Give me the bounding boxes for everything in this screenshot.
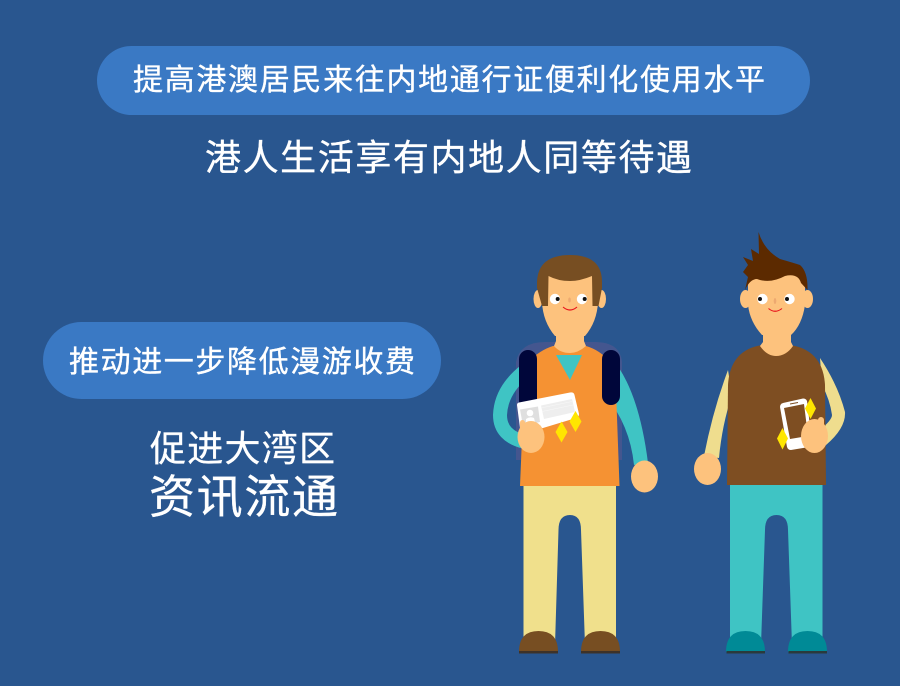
backpack straps [519,350,537,410]
text block: greater bay area information flow [149,428,338,523]
text block: greater bay area information flow: 资讯流通 [149,471,338,523]
right arm [820,358,845,445]
shoes [726,631,827,654]
shoes [519,631,620,654]
teal shirt [556,355,582,380]
smartphone [780,398,812,450]
orange vest [520,346,620,486]
smile [563,307,577,310]
left arm [704,370,732,458]
neck [554,330,586,353]
text block: greater bay area information flow: 促进大湾区 [150,428,335,469]
trousers [524,486,616,645]
left hand [694,453,721,485]
right arm [605,365,648,465]
brown torso [727,345,826,485]
top pill heading [97,46,810,115]
sparkles [556,411,582,442]
eyes [757,294,795,304]
trousers [730,485,822,645]
smile [768,308,782,311]
hair [743,232,808,290]
neck [760,330,793,356]
head [748,272,805,335]
eyes [550,294,587,304]
figure: man with smartphone [694,232,845,654]
backpack shadow [516,342,622,460]
figure: man with backpack holding ID card [500,255,658,654]
head [542,270,598,336]
hair [537,255,602,306]
right hand [801,417,828,453]
ears [740,290,751,308]
left hand [518,420,544,453]
top pill heading: 提高港澳居民来往内地通行证便利化使用水平 [133,64,765,97]
roaming pill heading: 推动进一步降低漫游收费 [69,346,415,379]
ID card [517,392,579,431]
roaming pill heading [43,322,441,399]
right hand [631,460,658,492]
left arm [500,371,525,442]
subheading: equal treatment: 港人生活享有内地人同等待遇 [205,137,692,178]
ears [534,290,542,308]
sparkles [777,398,816,450]
